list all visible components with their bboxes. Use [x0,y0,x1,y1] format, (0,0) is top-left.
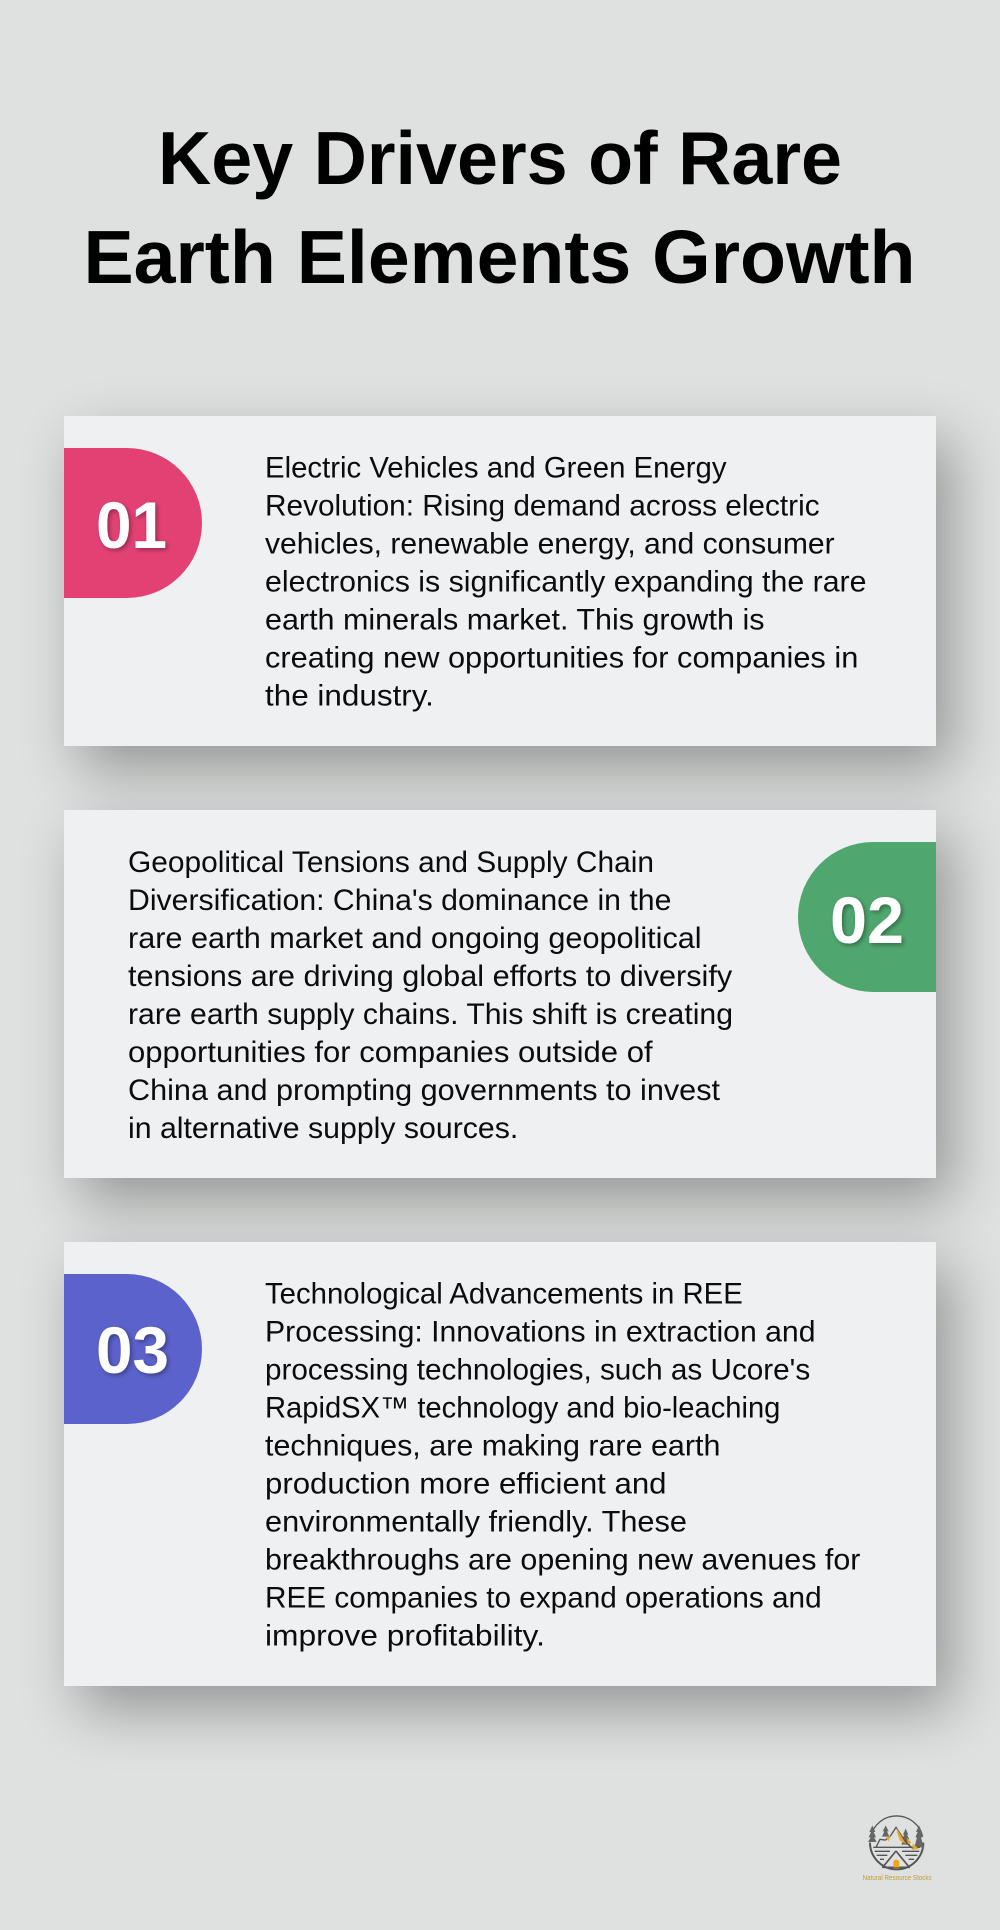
title: Key Drivers of Rare [158,116,842,200]
number and text 02: opportunities for companies outside of [128,1036,653,1069]
number and text 01: vehicles, renewable energy, and consumer [265,528,835,560]
number and text 03: processing technologies, such as Ucore's [265,1354,810,1386]
number and text 03: RapidSX™ technology and bio-leaching [265,1392,780,1424]
panel: card 02 geopolitical tensions [64,810,936,1178]
number and text 01: Electric Vehicles and Green Energy [265,452,727,484]
number and text 03: techniques, are making rare earth [265,1430,720,1462]
badge 02 [798,842,936,992]
number and text 03: Processing: Innovations in extraction and [265,1316,816,1348]
number and text 01: electronics is significantly expanding the rare [265,566,866,598]
number and text 01 [96,452,866,712]
number and text 02: rare earth market and ongoing geopolitical [128,922,702,955]
icon: Natural Resource Stocks logo: Natural Resource Stocks [863,1875,932,1882]
number and text 02 [128,846,906,1145]
number and text 02: China and prompting governments to invest [128,1074,720,1107]
number and text 03: REE companies to expand operations and [265,1582,822,1614]
number and text 02: in alternative supply sources. [128,1112,518,1145]
number and text 02: tensions are driving global efforts to diversify [128,960,732,993]
number and text 03: production more efficient and [265,1468,666,1500]
panel: card 01 electric vehicles [64,416,936,746]
number and text 01: Revolution: Rising demand across electric [265,490,820,522]
number and text 02: Geopolitical Tensions and Supply Chain [128,846,654,879]
number and text 01: creating new opportunities for companies in [265,642,858,674]
badge 01 [64,448,202,598]
title: Earth Elements Growth [84,215,916,299]
number and text 02: Diversification: China's dominance in the [128,884,671,917]
number and text 01: earth minerals market. This growth is [265,604,764,636]
number and text 02: rare earth supply chains. This shift is creating [128,998,733,1031]
badge 03 [64,1274,202,1424]
number and text 03: environmentally friendly. These [265,1506,687,1538]
title [84,116,916,299]
number and text 03: breakthroughs are opening new avenues for [265,1544,861,1576]
number and text 03: improve profitability. [265,1620,545,1652]
number and text 01: 01 [96,488,167,562]
number and text 03 [96,1278,861,1652]
number and text 01: the industry. [265,680,434,712]
number and text 03: 03 [96,1313,169,1387]
number and text 02: 02 [830,883,904,957]
panel: card 03 technological advancements [64,1242,936,1686]
number and text 03: Technological Advancements in REE [265,1278,743,1310]
